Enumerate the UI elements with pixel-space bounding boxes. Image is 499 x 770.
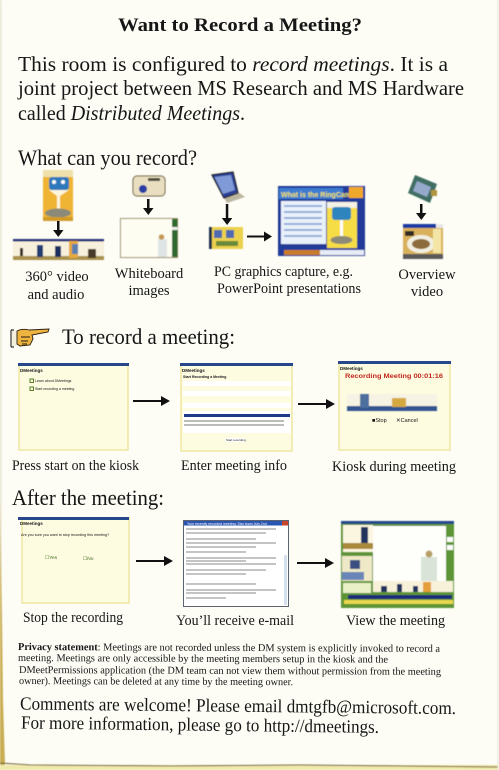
- caption: whiteboard: images: [128, 283, 170, 299]
- screen: kiosk start: Start recording a meeting: [35, 387, 74, 391]
- arrow: [53, 221, 64, 237]
- icon: laptop: [212, 172, 245, 203]
- image: whiteboard: [120, 218, 178, 258]
- caption: whiteboard: [115, 266, 184, 299]
- screen: stop confirmation: ☐No: [83, 556, 94, 562]
- caption: press start: Press start on the kiosk: [12, 458, 140, 474]
- caption: enter info: Enter meeting info: [181, 458, 287, 474]
- caption: you will receive email: You’ll receive e-mail: [176, 613, 294, 629]
- arrow: [298, 399, 335, 409]
- caption: 360 video: [25, 269, 89, 303]
- intro paragraph: [17, 52, 464, 125]
- heading: to record a meeting: To record a meeting:: [62, 324, 235, 349]
- caption: whiteboard: Whiteboard: [115, 266, 184, 282]
- screen: meeting info form: Start Recording a Meeting: [183, 375, 226, 379]
- icon: overview camera: [408, 175, 437, 203]
- screen: recording in progress: DMeetings: [340, 366, 363, 371]
- arrow: [247, 232, 272, 242]
- screen: kiosk start: [18, 363, 129, 450]
- title: Want to Record a Meeting?: [118, 16, 362, 36]
- caption: pc graphics: PC graphics capture, e.g.: [214, 264, 353, 280]
- screen: stop confirmation: [18, 517, 129, 603]
- arrow: [136, 556, 173, 566]
- heading: after the meeting: After the meeting:: [12, 485, 164, 510]
- icon: 360 degree camera: [43, 170, 73, 221]
- privacy statement: DMeetPermissions application (the DM team can not view them without permission from the meeting: [19, 665, 442, 678]
- caption: overview: video: [411, 284, 443, 300]
- caption: overview: Overview: [398, 267, 456, 283]
- icon: digital camera: [133, 176, 165, 196]
- privacy statement: meeting. Meetings are only accessible by the meeting members setup in the kiosk and the: [18, 653, 388, 666]
- intro paragraph: called Distributed Meetings.: [18, 101, 245, 125]
- screen: email window: [184, 520, 288, 606]
- screen: kiosk start: Learn about DMeetings: [35, 379, 72, 383]
- arrow: [143, 199, 154, 215]
- screen: recording in progress: [338, 361, 451, 450]
- arrow: [222, 204, 232, 225]
- closing comments: [20, 695, 456, 738]
- arrow: [133, 396, 170, 406]
- screen: meeting info form: [180, 363, 293, 451]
- image: powerpoint slide: [278, 186, 365, 256]
- arrow: [297, 558, 334, 568]
- screen: stop confirmation: ☐Yes: [45, 555, 58, 561]
- screen: meeting viewer: [341, 521, 454, 608]
- caption: overview: [398, 267, 456, 300]
- intro paragraph: joint project between MS Research and MS Hardware: [17, 76, 464, 100]
- screen: recording in progress: ■Stop: [372, 418, 387, 424]
- icon: pointing hand: [11, 329, 49, 347]
- screen: stop confirmation: DMeetings: [20, 521, 43, 526]
- screen: stop confirmation: Are you sure you want to stop recording this meeting?: [21, 533, 109, 537]
- intro paragraph: This room is configured to record meetings. It is a: [18, 52, 449, 76]
- screen: meeting info form: Start recording: [226, 438, 246, 442]
- image: overview video window: [403, 224, 443, 259]
- caption: 360 video: 360° video: [25, 269, 89, 285]
- caption: view the meeting: View the meeting: [346, 613, 445, 629]
- screen: meeting info form: DMeetings: [182, 368, 205, 373]
- closing comments: Comments are welcome! Please email dmtgfb@microsoft.com.: [20, 695, 456, 719]
- privacy statement: Privacy statement: Meetings are not recorded unless the DM system is explicitly invoked to record a: [18, 642, 440, 655]
- closing comments: For more information, please go to http://dmeetings.: [21, 714, 379, 738]
- caption: kiosk during meeting: Kiosk during meeting: [332, 459, 456, 475]
- caption: 360 video: and audio: [28, 287, 84, 303]
- screen: recording in progress: ✕Cancel: [396, 418, 418, 424]
- caption: pc graphics: PowerPoint presentations: [217, 281, 361, 297]
- arrow: [416, 204, 426, 220]
- screen: email window: Your recently recorded meeting: Star team July 2nd: [187, 522, 267, 526]
- screen: kiosk start: DMeetings: [20, 368, 43, 373]
- heading: what can you record: What can you record?: [18, 145, 197, 170]
- image: small pc thumbnail: [209, 227, 243, 249]
- caption: stop the recording: Stop the recording: [23, 610, 123, 626]
- caption: pc graphics: [214, 264, 361, 297]
- privacy statement: owner). Meetings can be deleted at any time by the meeting owner.: [19, 676, 293, 688]
- image: panorama strip: [13, 239, 104, 260]
- image: powerpoint slide: What is the RingCam?: [281, 192, 355, 199]
- screen: recording in progress: Recording Meeting 00:01:16: [345, 373, 443, 380]
- privacy statement: [18, 642, 442, 688]
